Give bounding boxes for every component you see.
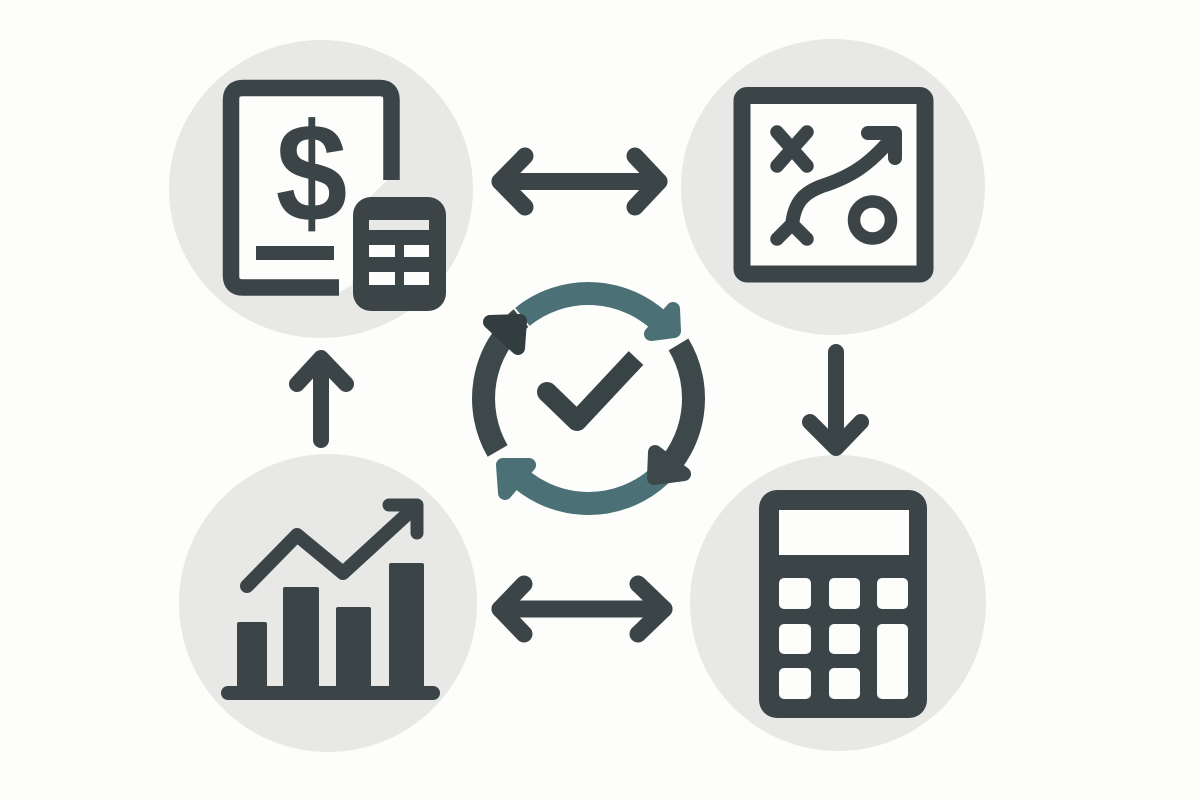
- arrow: growth chart to budget: [297, 358, 346, 440]
- panel: budget circle: [169, 40, 473, 338]
- arrowhead: upper left: [490, 321, 520, 348]
- icon: budget document with dollar and calculator: $: [276, 94, 347, 251]
- arrow: budget to strategy: [500, 156, 659, 207]
- icon: budget document with dollar and calculator: [231, 88, 446, 311]
- arrowhead: top right: [651, 309, 674, 334]
- arrow: strategy to calculator: [810, 352, 861, 448]
- cycle arc: left dark: [484, 318, 521, 451]
- arrowhead: lower left: [503, 465, 529, 493]
- checkmark: [537, 358, 636, 421]
- icon: calculator: [759, 490, 927, 718]
- icon: central cycle with checkmark: [484, 294, 694, 504]
- cycle arc: bottom teal: [510, 469, 660, 504]
- panel: strategy circle: [681, 39, 985, 335]
- cycle arc: top teal: [522, 294, 663, 324]
- icon: bar chart with trend arrow: [228, 505, 433, 693]
- arrow: calculator to growth chart: [500, 584, 664, 634]
- cycle arc: right dark: [660, 344, 694, 475]
- arrowhead: lower right: [654, 452, 684, 478]
- panel: calculator circle: [690, 455, 986, 751]
- panel: growth chart circle: [179, 454, 477, 752]
- icon: strategy playbook: [742, 96, 925, 274]
